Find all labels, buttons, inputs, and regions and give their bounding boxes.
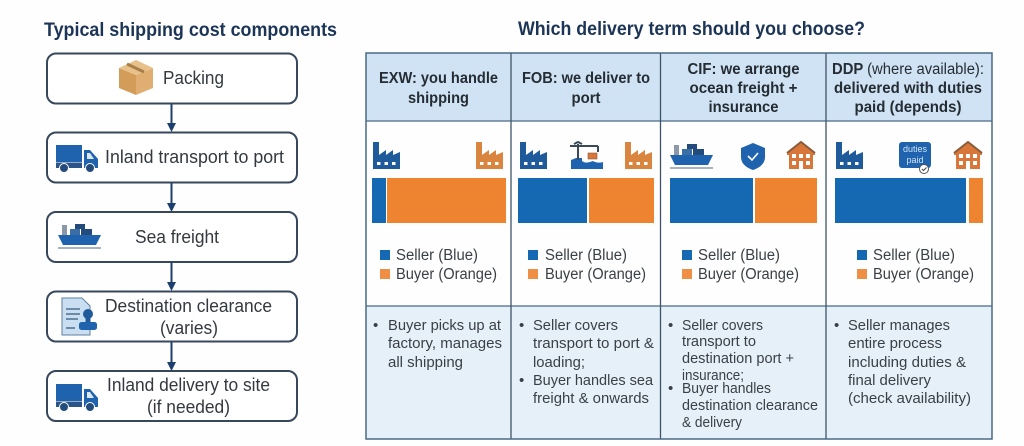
legend — [857, 247, 974, 283]
share bar — [835, 178, 983, 223]
notes: all shipping — [388, 354, 463, 371]
notes: & delivery — [682, 414, 742, 431]
share bar — [372, 178, 506, 223]
notes: loading; — [533, 354, 585, 371]
arrow: inland transport to sea freight — [167, 183, 176, 212]
notes: (check availability) — [848, 390, 971, 407]
notes: transport to — [682, 333, 756, 350]
notes: destination clearance — [682, 397, 818, 414]
share bar — [670, 178, 817, 223]
notes: Seller manages — [848, 317, 950, 334]
notes: transport to port & — [533, 335, 654, 352]
panel: shipping cost flow — [47, 54, 297, 421]
step: inland delivery: (if needed) — [147, 397, 230, 417]
table notes background — [366, 306, 992, 439]
notes: entire process — [848, 335, 942, 352]
column title: EXW: you handle — [379, 70, 498, 87]
icons: factory, duties paid badge, warehouse: paid — [906, 155, 924, 165]
icon: delivery truck — [56, 384, 98, 412]
notes: insurance; — [682, 367, 744, 384]
step: sea freight: Sea freight — [135, 227, 219, 247]
arrow: sea freight to clearance — [167, 262, 176, 291]
notes: • — [668, 380, 673, 397]
notes: including duties & — [848, 354, 966, 371]
icon: document and stamp — [62, 298, 97, 335]
legend: Buyer (Orange) — [873, 266, 974, 283]
icons: factories — [373, 142, 503, 169]
column title: ocean freight + — [690, 80, 798, 97]
legend: Seller (Blue) — [873, 247, 955, 264]
legend — [528, 247, 646, 283]
column: CIF — [668, 61, 818, 431]
step: sea freight — [47, 212, 297, 262]
notes: • — [834, 317, 839, 334]
column: DDP — [832, 61, 984, 407]
notes: Buyer handles — [682, 380, 771, 397]
legend — [682, 247, 799, 283]
legend: Buyer (Orange) — [545, 266, 646, 283]
notes: factory, manages — [388, 335, 502, 352]
legend: Buyer (Orange) — [698, 266, 799, 283]
icons: factory, duties paid badge, warehouse: duties — [903, 144, 928, 154]
notes: Buyer picks up at — [388, 317, 502, 334]
column title — [688, 61, 800, 116]
share bar — [518, 178, 654, 223]
column title — [832, 61, 984, 116]
heading: delivery term: Which delivery term should you choose? — [518, 19, 865, 40]
step: inland delivery: Inland delivery to site — [107, 375, 270, 395]
column title: FOB: we deliver to — [522, 70, 650, 87]
column title: shipping — [408, 90, 469, 107]
column title: CIF: we arrange — [688, 61, 800, 78]
table header background — [366, 53, 992, 121]
legend: Seller (Blue) — [698, 247, 780, 264]
legend — [380, 247, 497, 283]
notes — [373, 317, 502, 371]
column title: paid (depends) — [854, 99, 962, 116]
notes — [668, 317, 818, 431]
step: destination clearance — [47, 292, 297, 342]
step: packing — [47, 54, 297, 104]
column title: insurance — [708, 99, 779, 116]
icons: ship, shield, warehouse — [670, 142, 815, 170]
icon: cardboard box — [119, 60, 153, 95]
heading: shipping cost components: Typical shipping cost components — [44, 20, 337, 41]
notes: • — [668, 317, 673, 334]
arrow: packing to inland transport — [167, 104, 176, 132]
arrow: clearance to inland delivery — [167, 342, 176, 371]
notes: Seller covers — [682, 317, 763, 334]
column title: DDP (where available): — [832, 61, 984, 78]
notes: Buyer handles sea — [533, 372, 654, 389]
step: packing: Packing — [163, 68, 224, 88]
notes — [519, 317, 654, 407]
icons: factory, duties paid badge, warehouse — [836, 142, 982, 174]
notes: destination port + — [682, 350, 794, 367]
notes: Seller covers — [533, 317, 618, 334]
step: inland delivery — [47, 371, 297, 421]
step: inland transport: Inland transport to port — [105, 147, 284, 167]
legend: Buyer (Orange) — [396, 266, 497, 283]
icon: cargo ship — [58, 224, 101, 248]
step: destination clearance: (varies) — [160, 318, 218, 338]
column title — [379, 70, 498, 107]
legend: Seller (Blue) — [396, 247, 478, 264]
panel: delivery term table — [366, 53, 992, 439]
legend: Seller (Blue) — [545, 247, 627, 264]
notes — [834, 317, 971, 407]
column: FOB — [518, 70, 654, 407]
column title: port — [572, 90, 600, 107]
icon: truck — [56, 145, 98, 172]
step: destination clearance: Destination clearance — [105, 296, 272, 316]
column title — [522, 70, 650, 107]
column: EXW — [372, 70, 506, 371]
notes: final delivery — [848, 372, 931, 389]
notes: freight & onwards — [533, 390, 649, 407]
notes: • — [519, 372, 524, 389]
icons: factory, port crane, factory — [520, 142, 652, 169]
step: inland transport — [47, 132, 297, 182]
notes: • — [373, 317, 378, 334]
notes: • — [519, 317, 524, 334]
column title: delivered with duties — [834, 80, 982, 97]
